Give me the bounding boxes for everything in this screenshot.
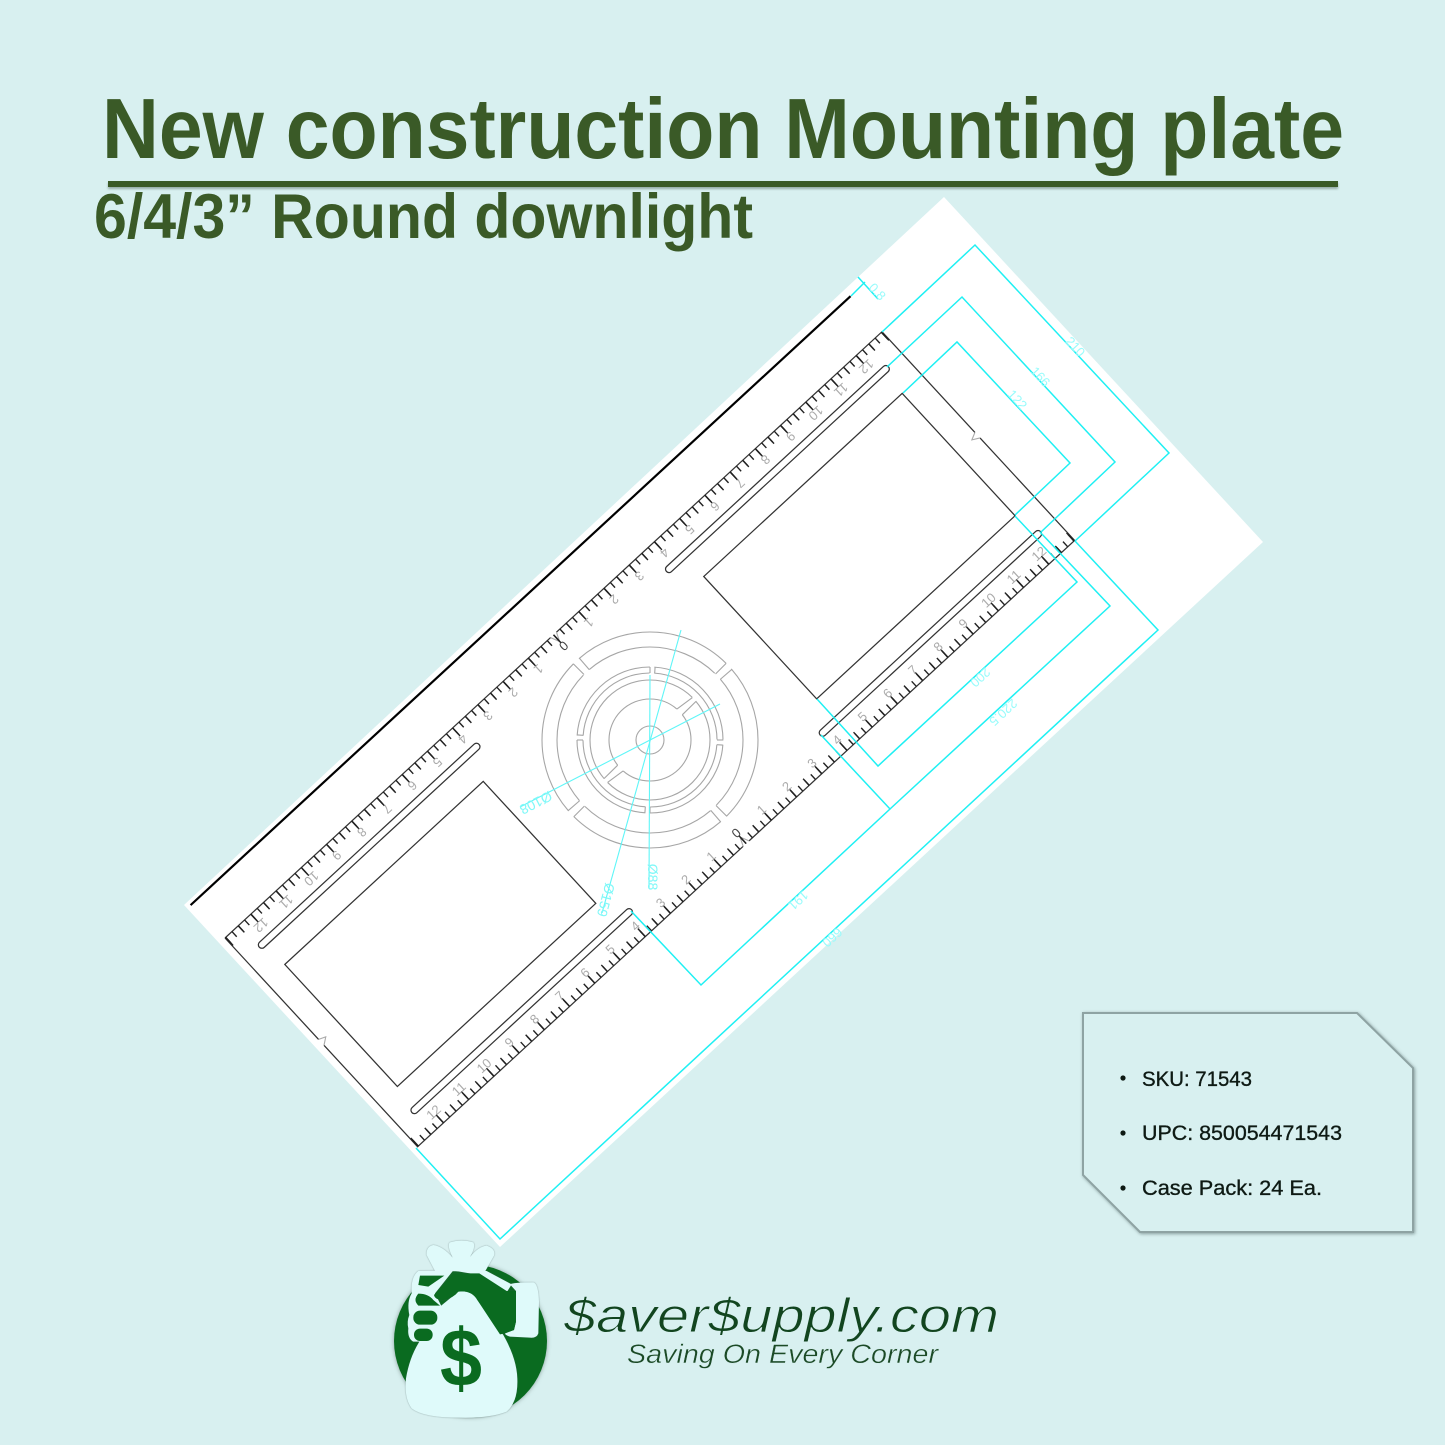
bottom ruler numbers: 4: [829, 732, 845, 748]
bottom ruler numbers: 5: [602, 941, 618, 957]
top ruler numbers: 7: [379, 801, 395, 817]
bottom ruler numbers: 10: [474, 1055, 494, 1076]
top ruler numbers: 3: [632, 568, 647, 584]
black reference line: [191, 296, 851, 905]
top ruler numbers: 4: [455, 731, 471, 747]
cyan dimension: 200: [817, 516, 1077, 766]
cyan dimension: 191: 191: [785, 887, 811, 913]
notches: [225, 332, 1075, 1147]
bottom ruler numbers: 0: [729, 825, 744, 841]
top ruler numbers: 1: [581, 615, 597, 631]
icon: money bag in hand: [394, 1241, 547, 1418]
case pack line: Case Pack: 24 Ea.: [1142, 1177, 1322, 1200]
top ruler numbers: 4: [657, 545, 672, 561]
bottom ruler ticks: [414, 536, 1072, 1144]
SKU line: SKU: 71543: [1142, 1068, 1252, 1091]
mounting slots: [257, 364, 1043, 1115]
cyan dimension: 220.5: [821, 532, 1110, 809]
top ruler numbers: [251, 356, 877, 936]
bottom ruler numbers: 7: [552, 988, 567, 1004]
bottom ruler numbers: 11: [1004, 567, 1024, 587]
top ruler numbers: 2: [506, 684, 521, 700]
cyan dimension: 122: [903, 342, 1070, 515]
top ruler numbers: 8: [354, 824, 370, 840]
right window: [704, 393, 1015, 699]
top ruler numbers: 11: [831, 380, 851, 400]
product info callout: [1083, 1013, 1413, 1232]
concentric knockout rings: [542, 632, 758, 848]
mounting plate outline and rulers: [191, 296, 1075, 1149]
technical drawing sheet: [184, 197, 1263, 1247]
bottom ruler numbers: 1: [754, 802, 769, 818]
title underline: [108, 181, 1338, 187]
diameter callout: 159: Ø159: [594, 881, 618, 919]
cyan dimension: 166: [887, 297, 1115, 532]
bottom ruler numbers: 9: [502, 1034, 517, 1050]
icon: money bag in hand: $: [440, 1313, 482, 1404]
top ruler numbers: 12: [856, 356, 877, 377]
top ruler numbers: 0: [556, 638, 571, 654]
top ruler numbers: 6: [405, 778, 420, 793]
top ruler numbers: 3: [480, 708, 496, 724]
cyan dimension: 210: [882, 245, 1169, 541]
bottom ruler numbers: 8: [527, 1011, 542, 1027]
top ruler numbers: 1: [531, 661, 546, 677]
callout panel: [1083, 1013, 1413, 1232]
logo: [394, 1241, 999, 1418]
bottom ruler numbers: [423, 543, 1049, 1123]
white paper: [184, 197, 1263, 1247]
bottom ruler numbers: 3: [804, 755, 820, 771]
diameter callout: 108: [517, 704, 720, 818]
brand name: $aver$upply.com: [563, 1290, 999, 1343]
top ruler numbers: 9: [783, 428, 798, 444]
bottom ruler numbers: 6: [577, 965, 593, 981]
bottom ruler numbers: 1: [703, 848, 719, 864]
top ruler numbers: 9: [329, 847, 344, 863]
bottom ruler numbers: 2: [779, 778, 794, 794]
top ruler numbers: 7: [732, 475, 748, 491]
bottom ruler numbers: 3: [653, 895, 668, 911]
tagline: Saving On Every Corner: [627, 1339, 939, 1369]
diameter callout: 159: [594, 630, 681, 919]
cyan dimension: 660: 660: [819, 924, 845, 950]
bottom ruler numbers: 8: [930, 639, 946, 655]
cyan dimension: 210: 210: [1062, 334, 1088, 360]
title: New construction Mounting plate: [102, 82, 1344, 177]
left window: [285, 781, 596, 1086]
bottom ruler numbers: 12: [1029, 543, 1049, 564]
bottom ruler numbers: 10: [978, 590, 999, 611]
cyan dimension: 0.8: [851, 277, 889, 303]
bottom ruler numbers: 9: [956, 615, 971, 631]
cyan dimension: 220.5: 220.5: [986, 696, 1020, 729]
cyan dimension: 0.8: 0.8: [866, 280, 889, 303]
top ruler numbers: 10: [301, 868, 322, 889]
top ruler numbers: 2: [606, 591, 622, 607]
cyan dimension: 166: 166: [1027, 364, 1053, 390]
bottom ruler numbers: 6: [880, 685, 895, 701]
cyan dimension: 122: 122: [1004, 387, 1030, 413]
top ruler numbers: 10: [805, 403, 826, 424]
top ruler numbers: 5: [430, 754, 445, 770]
diameter callout: 88: Ø88: [645, 864, 661, 890]
top ruler numbers: 5: [682, 522, 698, 537]
top ruler numbers: 8: [758, 452, 773, 468]
bottom ruler numbers: 11: [449, 1079, 469, 1099]
bottom ruler numbers: 7: [905, 662, 921, 678]
bottom ruler numbers: 5: [855, 709, 870, 725]
cyan dimension: 660: [416, 541, 1158, 1239]
UPC line: UPC: 850054471543: [1142, 1122, 1342, 1145]
bottom ruler numbers: 2: [678, 871, 694, 887]
cyan dimension: 200: 200: [967, 664, 993, 690]
top ruler numbers: 11: [276, 892, 296, 912]
top ruler numbers: 12: [251, 915, 271, 936]
plate outline: [225, 332, 1075, 1147]
cyan dimension: 191: [631, 809, 890, 985]
diameter callout: 108: Ø108: [517, 788, 555, 818]
top ruler numbers: 6: [707, 498, 723, 514]
bottom ruler numbers: 4: [628, 918, 643, 934]
subtitle: 6/4/3” Round downlight: [94, 182, 753, 252]
top ruler ticks: [228, 334, 886, 942]
bottom ruler numbers: 12: [423, 1102, 444, 1123]
